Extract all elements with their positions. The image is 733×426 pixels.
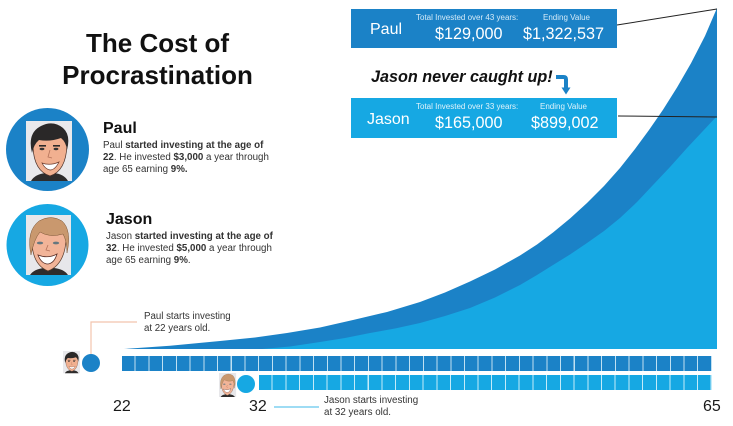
connector: Paul ending value [617,9,717,25]
title: Procrastination [62,60,253,90]
Paul invested value: $129,000 [435,25,503,43]
text block: Jason [106,211,273,266]
text block: Paul: Paul [103,120,137,137]
Jason invested value: $165,000 [435,114,503,132]
small avatar: Paul [63,351,80,373]
small avatar: Jason [219,373,236,397]
area chart: Jason growth curve [262,116,717,349]
axis label: age 32: 32 [249,398,267,415]
annotation: Jason start: at 32 years old. [324,407,391,418]
area chart: Paul growth curve [124,8,717,349]
panel: Jason summary [351,98,617,138]
title: The Cost of [86,28,229,58]
callout: Jason never caught up: Jason never caught up! [371,68,553,86]
connector: Jason ending value [618,116,717,117]
Jason name: Jason [367,111,410,128]
text block: Jason: 32. He invested $5,000 a year through [106,243,272,254]
text block: Paul: Paul started investing at the age of [103,140,263,151]
annotation: Paul start [144,311,231,334]
text block: Paul: age 65 earning 9%. [103,164,188,175]
axis label: age 22: 22 [113,398,131,415]
text block: Jason: Jason [106,211,152,228]
Paul start marker [82,354,100,372]
axis label: age 65: 65 [703,398,721,415]
Jason start marker [237,375,255,393]
Jason invested label: Total Invested over 33 years: [416,102,518,111]
Jason ending label: Ending Value [540,102,587,111]
avatar: Paul [6,108,89,191]
text block: Paul [103,120,269,175]
timeline bar: Paul years [122,356,712,371]
Paul invested label: Total Invested over 43 years: [416,13,518,22]
text block: Jason: Jason started investing at the age of [106,231,273,242]
Jason ending value: $899,002 [531,114,599,132]
avatar: Jason [6,204,88,286]
Paul ending value: $1,322,537 [523,25,604,43]
text block: Paul: 22. He invested $3,000 a year through [103,152,269,163]
Paul name: Paul [370,21,402,38]
Paul ending label: Ending Value [543,13,590,22]
annotation: Paul start: Paul starts investing [144,311,231,322]
annotation: Jason start [324,395,418,418]
text block: Jason: age 65 earning 9%. [106,255,191,266]
annotation: Paul start: at 22 years old. [144,323,210,334]
arrow: Jason never caught up [556,77,570,94]
callout leader: Paul start [91,322,137,354]
panel: Paul summary [351,9,617,48]
title [62,28,253,90]
timeline bar: Jason years [259,375,712,390]
arrow: Jason start [274,406,319,408]
annotation: Jason start: Jason starts investing [324,395,418,406]
